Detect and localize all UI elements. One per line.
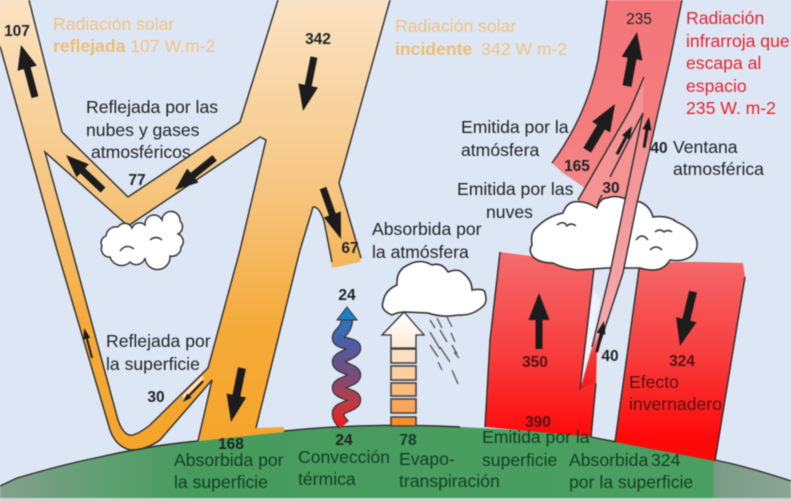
value 168: 168 [218,436,244,453]
orange solar radiation flow [0,0,390,450]
evapotranspiration arrow [382,312,424,426]
red infrared block emitted by surface [485,252,596,437]
value 40 window: 40 [650,140,668,157]
value 350: 350 [522,354,548,371]
arrow: absorbed by atmosphere [315,185,349,242]
arrow: toward surface reflection [181,377,205,404]
label: emitted by atmosphere: Emitida por la [461,117,569,137]
label: emitted by clouds [457,179,574,222]
arrow: outgoing 235 [617,30,647,88]
heading: reflected solar radiation [53,14,215,56]
arrow: greenhouse 324 [670,289,703,348]
label: thermal convection [298,447,390,489]
arrow: atmosphere 165 [578,99,624,156]
label: emitted by clouds: Emitida por las [457,179,574,199]
arrow: clouds reflected [60,148,109,197]
label: evapotranspiration: 78 [399,432,417,449]
label: reflected by clouds: atmosféricos [91,142,191,162]
label: evapotranspiration: transpiración [399,471,500,491]
ground [0,425,791,501]
heading: incident solar radiation [395,16,567,59]
label: atmospheric window: Ventana [673,137,738,157]
value 324: 324 [669,353,695,370]
label: absorbed 324 by surface: por la superficie [569,472,693,492]
atmospheric window stripe [580,113,649,390]
value 30 surface: 30 [147,389,165,406]
label: absorbed by surface [174,450,284,492]
value 390: 390 [525,414,551,431]
heading: infrared escaping to space: escapa al [686,53,761,73]
label: atmospheric window [673,137,764,179]
label: reflected by clouds [86,97,218,162]
label: thermal convection: térmica [298,469,356,489]
arrow: surface reflection up [81,327,95,359]
label: reflected by clouds: Reflejada por las [86,97,218,117]
rain [430,317,459,384]
value 24 bottom: 24 [335,432,353,449]
label: absorbed 324 by surface [569,450,693,492]
arrow: window 40 lower [592,320,608,353]
label: thermal convection: Convección [298,447,390,467]
heading: incident solar radiation: incidente 342 W m-2 [395,39,567,59]
label: absorbed by atmosphere [372,219,482,262]
label: atmospheric window: atmosférica [673,159,764,179]
pale wedge beside surface emission [580,290,600,390]
cloud detail marks [557,223,672,250]
convection wave arrow [337,307,357,425]
heading: reflected solar radiation: Radiación solar [53,14,174,34]
arrow: incident 342 down [293,55,324,113]
value 67: 67 [341,240,359,257]
label: absorbed 324 by surface: Absorbida [569,450,648,470]
label: absorbed 324 by surface: 324 [651,450,681,470]
arrow: window 40 upper [640,116,653,148]
label: absorbed by atmosphere: la atmósfera [372,242,469,262]
value 30 clouds: 30 [602,180,620,197]
label: reflected by surface: Reflejada por [106,331,211,351]
arrow: absorbed by surface [221,366,252,424]
label: evapotranspiration [399,432,500,491]
cloud detail [120,238,162,251]
heading: infrared escaping to space: infrarroja que [686,31,790,51]
label: absorbed by atmosphere: Absorbida por [372,219,482,239]
value 107: 107 [4,23,30,40]
heading: infrared escaping to space [686,8,790,118]
label: evapotranspiration: Evapo- [399,449,455,469]
label: emitted by surface: superficie [482,450,557,470]
arrow: reflected 107 up [11,42,45,100]
value 235: 235 [626,11,652,28]
heading: infrared escaping to space: espacio [686,76,747,96]
label: emitted by surface [482,427,590,470]
label: reflected by clouds: nubes y gases [86,120,200,140]
upper infrared band [552,0,682,215]
rain cloud [382,262,486,316]
label: absorbed by surface: la superficie [174,472,268,492]
value 77: 77 [128,172,146,189]
value 40 lower: 40 [601,348,619,365]
label: emitted by atmosphere: atmósfera [461,140,539,160]
label: greenhouse effect [629,372,722,414]
value 342: 342 [305,31,331,48]
label: greenhouse effect: Efecto [629,372,679,392]
red block outlines [485,252,745,461]
heading: infrared escaping to space: 235 W. m-2 [686,98,776,118]
label: greenhouse effect: invernadero [629,394,722,414]
value 165: 165 [564,158,590,175]
value 24 top: 24 [338,287,356,304]
cloud below reflected band [101,211,183,270]
heading: reflected solar radiation: reflejada 107 W.m-2 [53,36,215,56]
heading: infrared escaping to space: Radiación [686,8,764,28]
cloud behind infrared bands [530,196,697,270]
arrow: emitted 350 [528,293,550,349]
label: absorbed by surface: Absorbida por [174,450,284,470]
heading: incident solar radiation: Radiación solar [395,16,516,36]
arrow: clouds incoming [169,151,220,197]
label: reflected by surface [106,331,211,374]
stripe outlines [592,113,648,352]
label: emitted by clouds: nuves [486,202,533,222]
label: reflected by surface: la superficie [106,354,200,374]
arrow: clouds 30 [613,124,636,156]
red block absorbed by surface [615,262,745,461]
label: emitted by surface: Emitida por la [482,427,590,447]
label: emitted by atmosphere [461,117,569,160]
